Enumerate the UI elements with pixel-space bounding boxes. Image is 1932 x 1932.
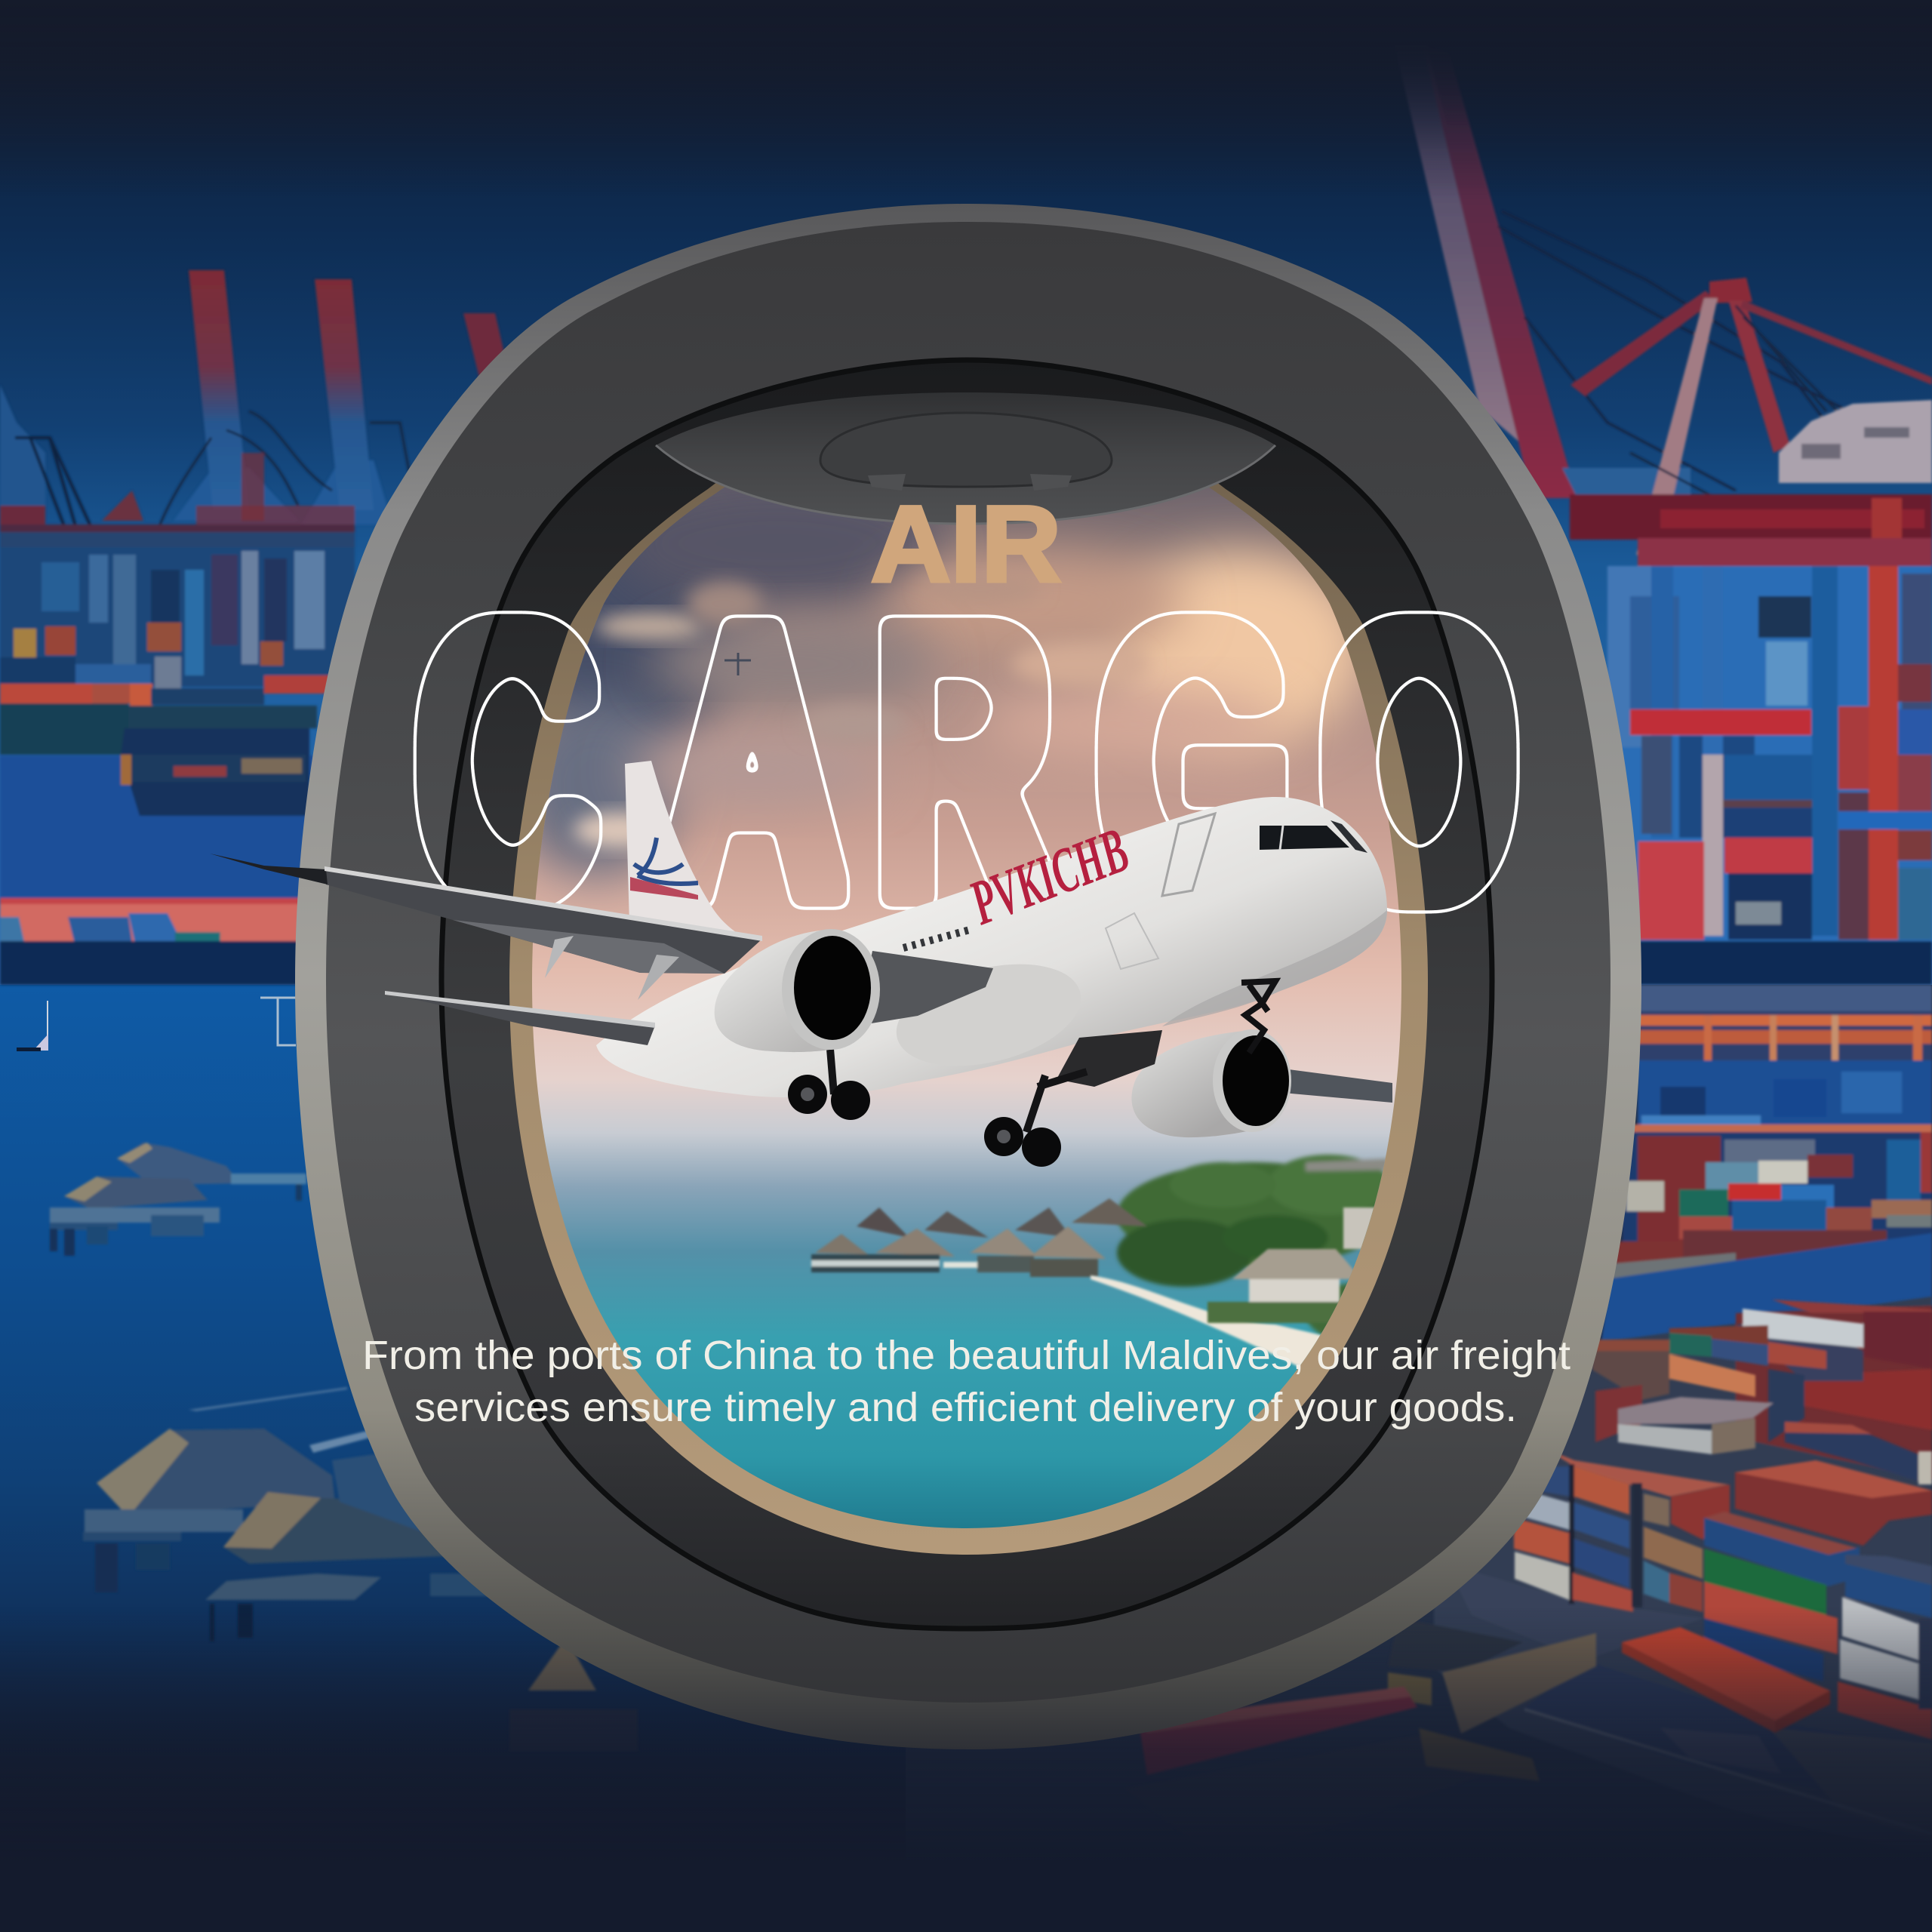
wing root dark underside (1057, 1030, 1162, 1087)
passenger window row (903, 930, 970, 948)
main gear far (984, 1072, 1087, 1167)
shade handle (820, 413, 1112, 491)
inner ring with dark edge (441, 360, 1492, 1629)
fuselage livery: PVKICHB (960, 814, 1137, 939)
airplane window frame (295, 204, 1641, 1749)
fuselage (596, 797, 1387, 1097)
window view: sky, sea and island (532, 488, 1401, 1528)
tan window liner (509, 400, 1428, 1555)
distant plane (724, 653, 751, 675)
beach villa (1208, 1208, 1389, 1323)
tail logo (630, 838, 698, 900)
description text (362, 1333, 1571, 1430)
description text: From the ports of China to the beautiful Maldives, our air freight (362, 1333, 1571, 1378)
overwater huts left upper (50, 1143, 306, 1256)
near engine (715, 929, 880, 1052)
title: CARGO outlined: CARGO (420, 552, 1512, 971)
lower right base (906, 985, 1932, 1932)
near wing (210, 854, 762, 1000)
beach (1088, 1274, 1321, 1367)
nose gear (1241, 981, 1275, 1053)
main gear near (788, 1049, 870, 1120)
overwater huts left lower (83, 1387, 638, 1751)
right port: big crane and gantry (1395, 45, 1932, 985)
right port: ground beneath containers (1388, 1297, 1932, 1857)
far engine (1131, 1029, 1291, 1137)
frame outer rim (295, 204, 1641, 1749)
right port: container stacks near (1514, 1300, 1932, 1740)
airplane (210, 761, 1392, 1167)
doors (1162, 814, 1215, 896)
overwater villas (811, 1198, 1147, 1277)
window shade (656, 392, 1275, 524)
sailboat (17, 1001, 48, 1051)
right port: container yard far (1600, 985, 1932, 1351)
wing root fairing (886, 947, 1091, 1083)
horizontal stabiliser (385, 991, 655, 1045)
frame face (326, 222, 1611, 1703)
left port skyline (0, 270, 513, 985)
island trees (1117, 1155, 1411, 1343)
tail fin (625, 761, 747, 951)
cockpit windows (1260, 820, 1367, 853)
harbour dock (1124, 1633, 1932, 1864)
near wing root (857, 951, 993, 1026)
nose shading (1162, 910, 1387, 1026)
far wing (1283, 1069, 1392, 1103)
white frame on water (260, 998, 296, 1045)
description text: services ensure timely and efficient delivery of your goods. (414, 1385, 1517, 1430)
lower left sea (0, 985, 906, 1932)
clouds (513, 475, 1366, 875)
title: AIR: AIR (871, 485, 1061, 605)
